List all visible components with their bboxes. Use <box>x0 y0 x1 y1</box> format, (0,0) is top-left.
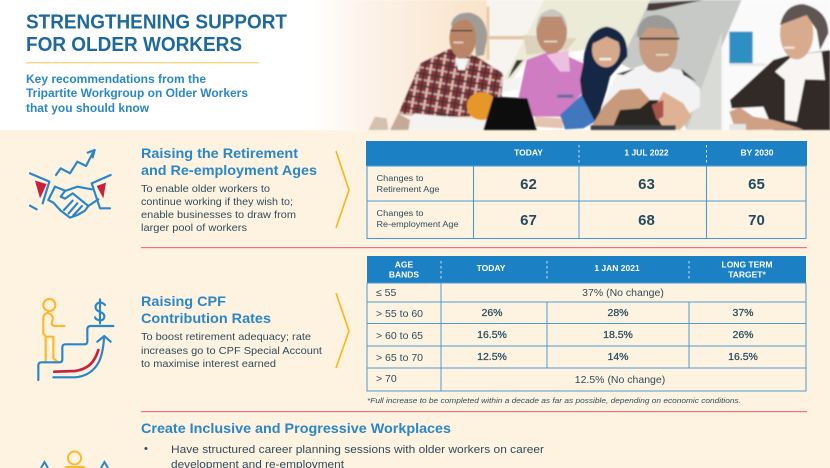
table: CPF rates by age band: 12.5% (No change) <box>575 374 665 386</box>
bullet text: • <box>144 443 148 455</box>
table: retirement ages: 70 <box>748 212 765 229</box>
bullet text: Have structured career planning sessions with older workers on career <box>171 444 544 456</box>
description: increases go to CPF Special Account <box>141 345 322 357</box>
subtitle: Tripartite Workgroup on Older Workers <box>26 86 248 100</box>
heading: Raising the Retirement <box>141 145 298 161</box>
photo collage of older workers <box>310 0 830 130</box>
table: retirement ages: TODAY <box>514 148 543 158</box>
table: retirement ages: 62 <box>520 176 537 193</box>
subtitle: Key recommendations from the <box>26 72 206 86</box>
title: FOR OLDER WORKERS <box>26 34 242 56</box>
heading: Raising CPF <box>141 293 226 309</box>
person: woman in dark suit <box>729 4 830 130</box>
table: CPF rates by age band: TODAY <box>477 263 506 273</box>
table: CPF rates by age band: LONG TERM <box>722 260 772 270</box>
panel: inclusive and progressive workplaces <box>41 420 544 468</box>
person: man in plaid shirt <box>368 13 503 130</box>
table: CPF rates by age band: 1 JAN 2021 <box>594 263 640 273</box>
heading: Create Inclusive and Progressive Workplaces <box>141 420 451 436</box>
description: continue working if they wish to; <box>141 196 293 208</box>
arrow: chevron <box>336 293 349 368</box>
table: CPF rates by age band: 26% <box>481 307 503 319</box>
table: CPF rates by age band: 37% (No change) <box>582 287 664 299</box>
panel: CPF contribution rates <box>38 256 806 405</box>
table: CPF rates by age band: 28% <box>607 307 629 319</box>
person: man in pink shirt <box>518 10 583 117</box>
description: larger pool of workers <box>141 222 247 234</box>
title <box>26 12 287 56</box>
table: CPF rates by age band: 16.5% <box>728 351 758 363</box>
table: CPF rates by age band: AGE <box>395 260 414 270</box>
footnote: *Full increase to be completed within a decade as far as possible, depending on economic conditions. <box>367 396 741 405</box>
heading: and Re-employment Ages <box>141 162 317 178</box>
table: CPF rates by age band: > 55 to 60 <box>376 308 423 320</box>
icon: person climbing stairs to dollar <box>38 299 113 380</box>
person: captain in white uniform <box>591 15 700 130</box>
table: CPF rates by age band: > 70 <box>376 373 397 385</box>
table: CPF rates by age band: 16.5% <box>477 329 507 341</box>
table: CPF rates by age band: BANDS <box>389 270 419 280</box>
table: retirement ages: Re-employment Age <box>376 219 459 229</box>
subtitle: that you should know <box>26 101 150 115</box>
heading: Contribution Rates <box>141 310 271 326</box>
table: CPF rates by age band: > 60 to 65 <box>376 330 423 342</box>
arrow: chevron <box>336 151 349 228</box>
table: retirement ages <box>366 141 807 238</box>
laptop <box>483 97 537 130</box>
table: CPF rates by age band: > 65 to 70 <box>376 352 423 364</box>
table: retirement ages: Changes to <box>376 208 424 218</box>
panel: retirement and re-employment ages <box>30 141 807 238</box>
heading <box>141 145 317 178</box>
table: retirement ages: Changes to <box>376 173 424 183</box>
table: CPF rates by age band: ≤ 55 <box>376 287 397 299</box>
table: retirement ages: 63 <box>638 176 655 193</box>
description: to maximise interest earned <box>141 358 276 370</box>
bullet text <box>144 443 544 468</box>
table: retirement ages: 1 JUL 2022 <box>624 148 669 158</box>
table: CPF rates by age band: TARGET* <box>728 270 766 280</box>
icon: group of people <box>41 452 108 468</box>
table: CPF rates by age band <box>367 256 806 391</box>
table: retirement ages: 65 <box>748 176 765 193</box>
description <box>141 331 322 370</box>
description: To boost retirement adequacy; rate <box>141 331 311 343</box>
table: CPF rates by age band: 37% <box>732 307 754 319</box>
description <box>141 183 296 234</box>
table: CPF rates by age band: 26% <box>732 329 754 341</box>
icon: handshake with rising arrow <box>30 150 111 218</box>
person: woman with dark hair <box>535 27 627 129</box>
header panel <box>0 0 830 130</box>
description: enable businesses to draw from <box>141 209 296 221</box>
table: CPF rates by age band: 12.5% <box>477 351 507 363</box>
table: retirement ages: 67 <box>520 212 537 229</box>
table: retirement ages: BY 2030 <box>741 148 774 158</box>
heading <box>141 293 271 326</box>
table: retirement ages: 68 <box>638 212 655 229</box>
table: CPF rates by age band: 18.5% <box>603 329 633 341</box>
title: STRENGTHENING SUPPORT <box>26 12 287 34</box>
subtitle <box>26 72 248 115</box>
table: CPF rates by age band: 14% <box>607 351 629 363</box>
table: retirement ages: Retirement Age <box>376 184 440 194</box>
description: To enable older workers to <box>141 183 270 195</box>
